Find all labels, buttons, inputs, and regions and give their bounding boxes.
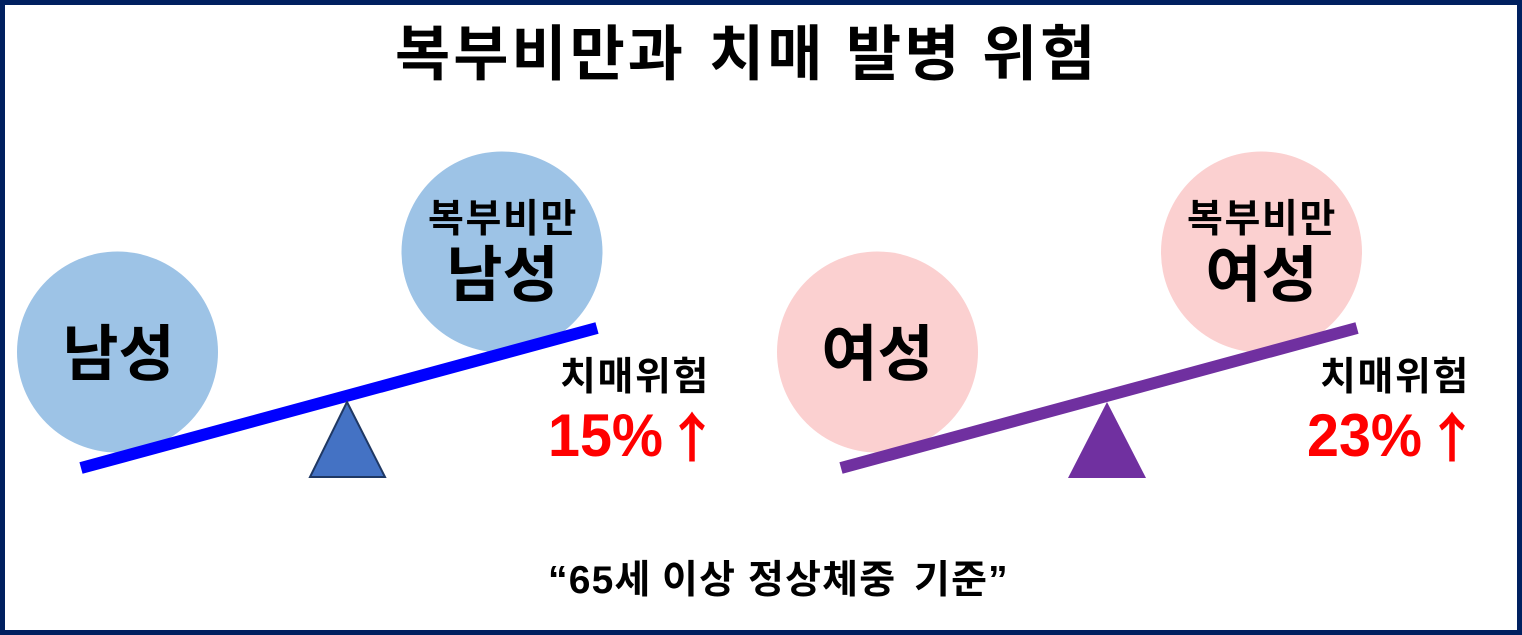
title: 위험 [982,21,1098,88]
seesaw fulcrum: women [1068,402,1146,478]
circle: men: 남성 [62,320,175,388]
circle: women with abdominal obesity: 복부비만 [1187,198,1337,241]
circle: women with abdominal obesity: 여성 [1205,241,1318,309]
stat: women 23 percent increase [1307,394,1479,473]
circle: women [777,252,978,452]
stat: women 23 percent increase: 23% [1307,402,1422,469]
footnote: “65세 [548,559,652,602]
title: 발병 [846,21,962,88]
label: dementia risk women: 치매위험 [1320,356,1470,399]
panel: women seesaw [777,152,1479,478]
circle: women with abdominal obesity [1161,152,1362,352]
seesaw fulcrum: men [310,402,385,477]
footnote: 정상체중 [748,559,896,602]
seesaw beam: men [81,328,597,468]
circle: men with abdominal obesity: 복부비만 [428,198,578,241]
seesaw beam: women [841,328,1357,468]
stat: men 15 percent increase: 15% [548,402,663,469]
title: 복부비만과 [395,21,686,88]
stat: men 15 percent increase [548,394,719,473]
circle: men with abdominal obesity [402,152,602,352]
circle: men with abdominal obesity: 남성 [446,241,559,309]
label: dementia risk men: 치매위험 [560,356,710,399]
circle: men [17,252,218,452]
circle: women: 여성 [821,320,934,388]
footnote: 기준” [914,559,1009,602]
panel: men seesaw [17,152,719,477]
footnote: 이상 [662,559,736,602]
title: 치매 [709,21,825,88]
stat: women 23 percent increase: ↑ [1425,394,1479,473]
stat: men 15 percent increase: ↑ [665,394,719,473]
